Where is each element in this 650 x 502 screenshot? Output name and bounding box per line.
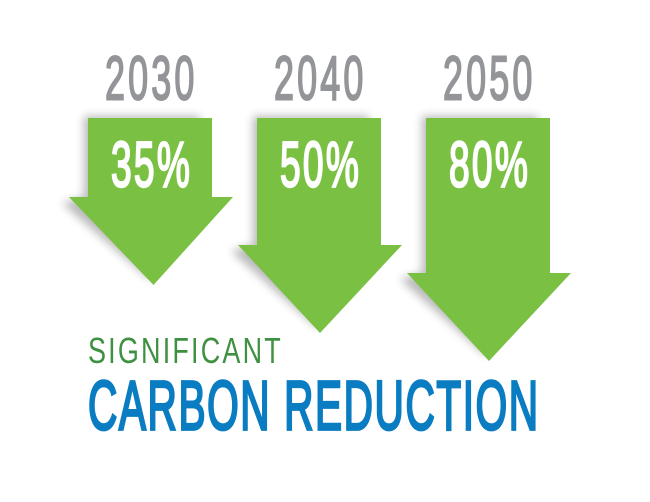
- year label: 2050: 2050: [443, 43, 532, 113]
- value: 80%: 80%: [449, 130, 528, 201]
- arrow: 2050 80%: [400, 116, 571, 361]
- heading: SIGNIFICANT: SIGNIFICANT: [88, 330, 281, 371]
- value: 35%: 35%: [111, 130, 190, 201]
- year label: 2040: 2040: [274, 43, 363, 113]
- heading: CARBON REDUCTION: CARBON REDUCTION: [88, 367, 538, 445]
- arrow: 2040 50%: [231, 116, 402, 333]
- value: 50%: 50%: [280, 130, 359, 201]
- arrow: 2030 35%: [62, 116, 233, 285]
- year label: 2030: 2030: [105, 43, 194, 113]
